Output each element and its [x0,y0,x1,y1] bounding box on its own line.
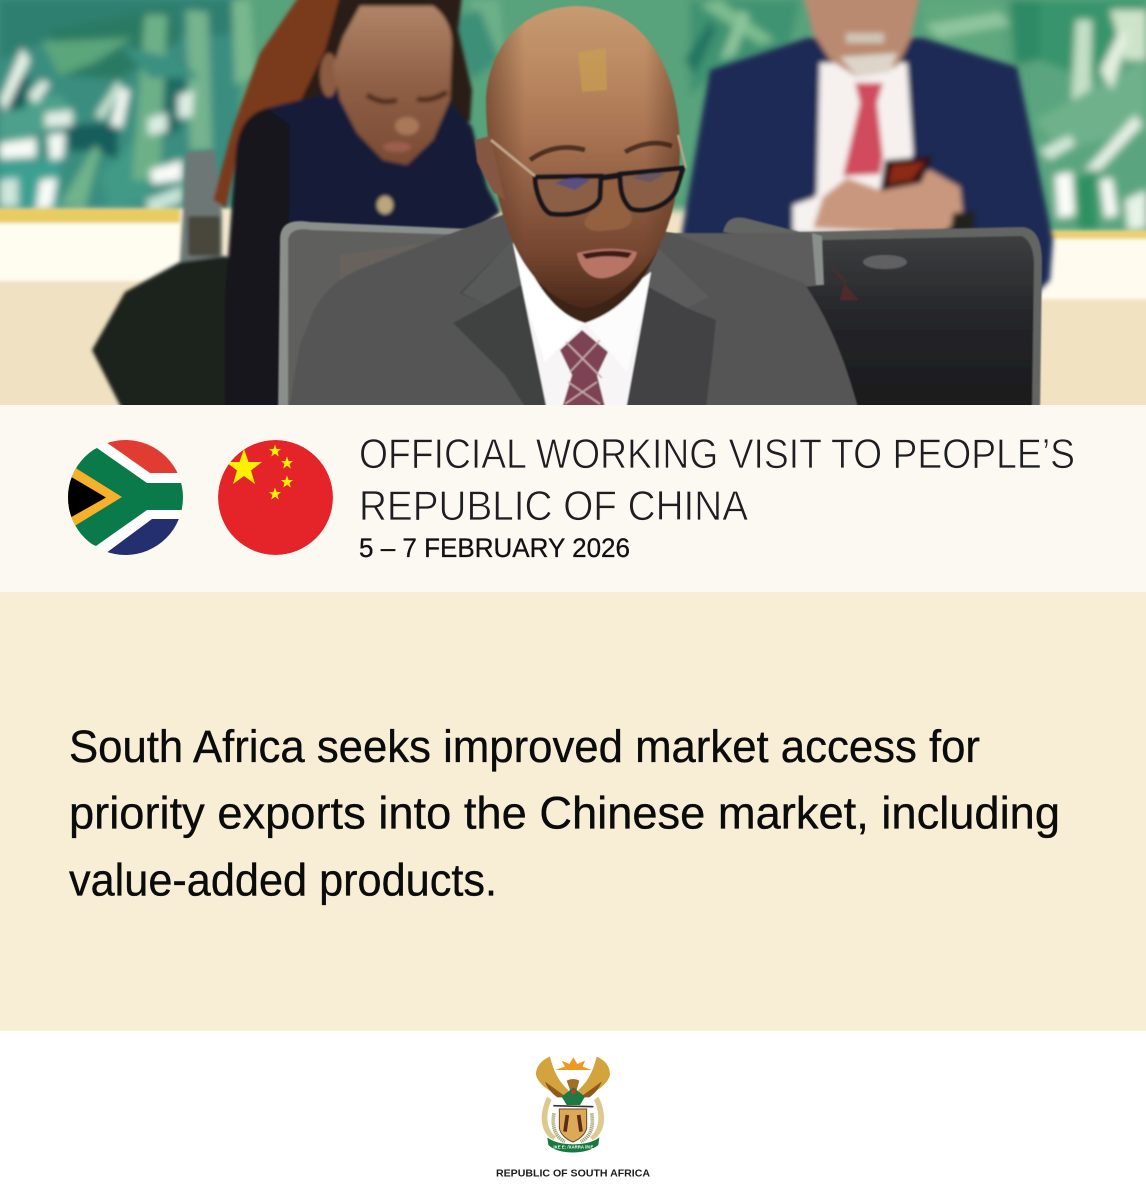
body text: priority exports into the Chinese market, including [69,788,1060,838]
heading: official working visit: REPUBLIC OF CHINA [359,482,748,529]
man's red tie [843,83,883,176]
secretary bird [567,1079,579,1090]
man's cuff [793,195,822,230]
speaker neck [534,250,658,324]
bamboo wall backdrop [0,0,1146,233]
speaker head side shading [486,28,680,244]
speaker lapel right [628,288,716,405]
icon: South African flag [60,430,185,565]
wings [536,1057,568,1097]
woman's eyes [367,92,447,102]
panel: key message [0,592,1146,1031]
wall and ledge [0,206,1146,300]
man's hands [813,170,963,232]
panel: photograph of delegates [0,0,1146,415]
woman's brooch [377,196,393,214]
body text: South Africa seeks improved market access for [69,721,980,772]
woman's face [333,6,452,165]
man in background with phone [682,0,1053,300]
sun [555,1057,592,1070]
speaker lapel left [454,272,546,405]
phone [880,156,933,191]
shield [559,1109,587,1142]
woman's dark hair [296,0,472,122]
speaker brows [530,143,672,160]
speaker head [486,6,680,308]
tusks [542,1097,556,1140]
date line: 5 – 7 FEBRUARY 2026 [359,533,630,563]
chair left, behind speaker [278,221,824,415]
man's head [803,0,920,77]
heading: official working visit [359,430,1075,529]
woman's ear [320,53,338,97]
speaker shirt [513,243,651,415]
republic label: REPUBLIC OF SOUTH AFRICA [496,1168,650,1180]
man's beard [840,53,897,77]
puffer jacket [90,254,231,405]
wheat [553,1113,592,1142]
panel: footer [0,1031,1146,1200]
woman in background [92,0,500,415]
heading: official working visit: OFFICIAL WORKING VISIT TO PEOPLE’S [359,430,1075,477]
body text [69,721,1060,906]
speaker mouth [577,249,637,278]
speaker ear [475,136,505,200]
forehead highlight [578,48,607,92]
woman's nose and mouth [395,117,419,135]
spear [553,1106,593,1107]
motto ribbon [547,1137,599,1152]
woman's top [228,90,502,256]
speaker nose [584,200,632,231]
speaker, main figure [288,6,860,415]
man's shirt [793,63,913,236]
rear chair column [180,150,222,262]
chair right, behind speaker [723,218,1042,415]
icon: Chinese flag [218,440,333,555]
speaker glasses [491,135,686,214]
woman's reddish hair [213,0,350,208]
panel: visit title band [0,405,1146,592]
speaker suit [288,205,860,415]
icon: coat of arms: !KE E: /XARRA //KE [553,1145,594,1150]
body text: value-added products. [69,854,497,906]
icon: coat of arms [536,1057,610,1152]
man's navy suit [682,38,1053,300]
speaker tie [560,330,608,415]
